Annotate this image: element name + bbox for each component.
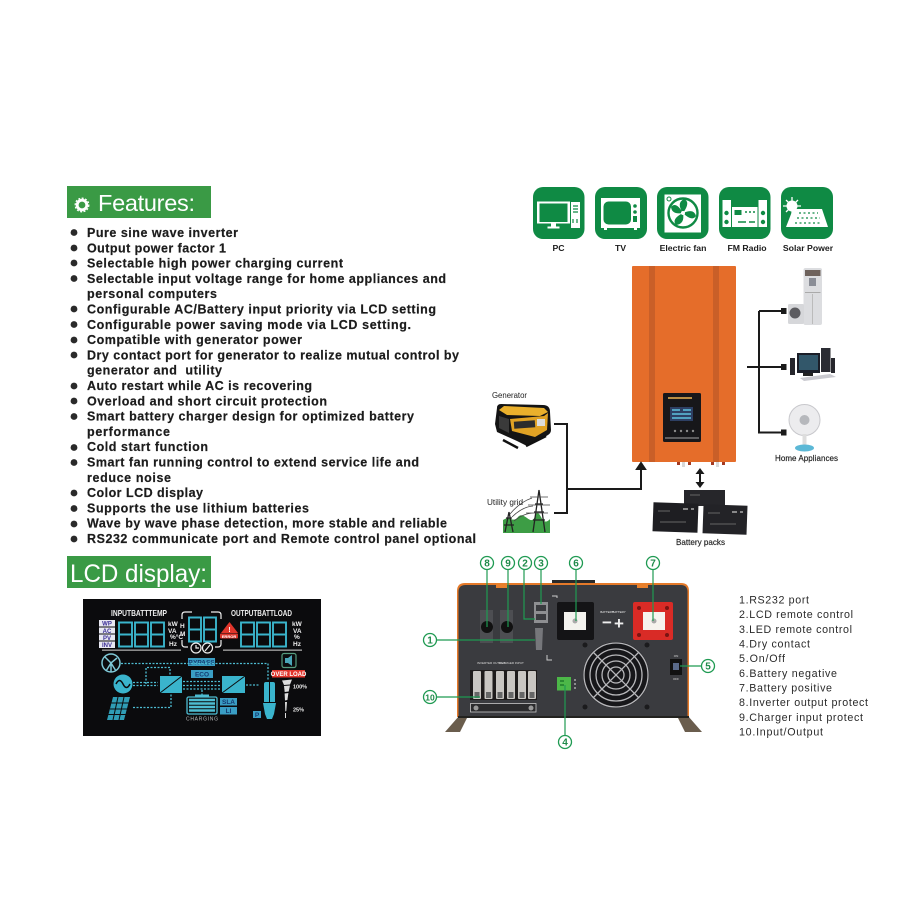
icon: TV: [595, 187, 647, 239]
callout leader lines: [436, 570, 702, 736]
callout number badges: [424, 556, 714, 748]
rear unit top connectors: [552, 580, 595, 583]
legend: rear panel parts: 9.Charger input protect: [739, 712, 863, 724]
features list: [71, 226, 476, 546]
label: generator: Generator: [492, 391, 527, 400]
legend: rear panel parts: 1.RS232 port: [739, 594, 809, 606]
rear polarity marks: BATTERY: [600, 610, 614, 614]
heading: Features: [67, 186, 211, 218]
features list: Dry contact port for generator to realize mutual control by: [87, 348, 459, 362]
callout numbers: 6: [573, 558, 579, 570]
callout numbers: 4: [562, 738, 568, 748]
LCD seven segment digits: [119, 618, 286, 646]
LCD source tags: PV: [103, 636, 111, 642]
icon: table fan: [789, 404, 820, 452]
rear power switch: ON: [674, 654, 678, 658]
LCD unit labels: VA: [293, 628, 302, 635]
LCD load bar: [282, 680, 307, 718]
LCD error warning: ERROR: [222, 634, 236, 639]
features list: Compatible with generator power: [87, 333, 302, 347]
LCD source tags: AC: [103, 629, 112, 635]
features list: Smart fan running control to extend service life and: [87, 456, 419, 470]
LCD battery type tags: SLA: [222, 699, 235, 706]
rear dry contact connector: [557, 677, 576, 690]
LCD source tags: WP: [102, 622, 112, 628]
features list: Selectable high power charging current: [87, 257, 344, 271]
rear terminal block: INVERTER OUTPUT: [477, 661, 505, 665]
LCD battery type tags: LI: [226, 708, 232, 715]
icon: solar power: [781, 187, 833, 239]
rear breakers: [480, 610, 513, 643]
legend: rear panel parts: 5.On/Off: [739, 653, 785, 665]
LCD battery icon: CHARGING: [186, 716, 218, 722]
LCD bulb icon: [263, 682, 276, 719]
rear polarity marks: +: [614, 614, 624, 633]
LCD unit labels: M: [180, 631, 185, 638]
appliance labels: [552, 243, 834, 253]
appliance labels: Solar Power: [783, 243, 834, 253]
features list: Selectable input voltage range for home appliances and: [87, 272, 446, 286]
heading: LCD display: LCD display:: [70, 560, 207, 588]
rear unit body: [457, 583, 689, 717]
features list: Wave by wave phase detection, more stable and reliable: [87, 517, 447, 531]
appliance labels: FM Radio: [727, 243, 767, 253]
label: battery packs: Battery packs: [676, 538, 725, 547]
LCD unit labels: [168, 621, 303, 648]
LCD source tags: INV: [102, 643, 112, 649]
LCD output header: OUTPUTBATTLOAD: [231, 608, 292, 618]
LCD converter icons: [160, 676, 245, 693]
appliance labels: PC: [552, 243, 565, 253]
LCD centre bracket and clocks: [182, 612, 221, 653]
LCD flow dashed lines: [121, 664, 268, 708]
LCD unit labels: VA: [168, 628, 177, 635]
LCD battery icon: [186, 694, 218, 722]
LCD unit labels: kW: [168, 621, 179, 628]
LCD error warning: [220, 622, 238, 639]
rear cooling fan: [582, 642, 650, 710]
label: home appliances: Home Appliances: [775, 454, 838, 463]
callout numbers: 2: [522, 558, 528, 570]
callout numbers: [425, 558, 711, 748]
LCD solar panel icon: [107, 697, 130, 720]
LCD input header: INPUTBATTTEMP: [111, 608, 167, 618]
LCD AC source icon: [114, 674, 132, 694]
legend: rear panel parts: 3.LED remote control: [739, 624, 852, 636]
rear battery negative terminal: [557, 602, 594, 640]
LCD unit labels: H: [180, 623, 185, 630]
rear terminal block: [470, 661, 537, 712]
callout numbers: 3: [538, 558, 544, 570]
callout numbers: 9: [505, 558, 511, 570]
LCD eco tag: ECO: [195, 672, 209, 678]
legend: rear panel parts: 2.LCD remote control: [739, 609, 853, 621]
LCD battery type tags: [220, 698, 261, 719]
rear power switch: [670, 654, 682, 681]
features list: performance: [87, 425, 170, 439]
features list: reduce noise: [87, 471, 171, 485]
legend: rear panel parts: [739, 594, 868, 738]
features list: Color LCD display: [87, 486, 203, 500]
LCD unit labels: kW: [292, 621, 303, 628]
icon: generator: [495, 404, 551, 448]
LCD battery type tags: P: [255, 712, 260, 719]
features list: generator and utility: [87, 364, 222, 378]
legend: rear panel parts: 6.Battery negative: [739, 668, 837, 680]
features list: Output power factor 1: [87, 241, 226, 255]
callout numbers: 1: [427, 636, 433, 646]
LCD unit labels: Hz: [293, 641, 302, 648]
rear polarity marks: −: [602, 613, 612, 632]
inverter front unit: [632, 266, 736, 467]
label: utility grid: Utility grid: [487, 498, 523, 507]
features list: Smart battery charger design for optimized battery: [87, 410, 414, 424]
features list: Pure sine wave inverter: [87, 226, 238, 240]
rear polarity marks: BATTERY: [612, 610, 626, 614]
LCD bypass tag: BYPASS: [188, 660, 215, 666]
icon: FM radio: [719, 187, 770, 239]
LCD eco tag: [191, 670, 213, 678]
panel: LCD display screen: [83, 599, 321, 736]
appliance labels: TV: [615, 243, 626, 253]
features list: Supports the use lithium batteries: [87, 501, 309, 515]
LCD overload tag: OVER LOAD: [271, 672, 307, 678]
LCD unit labels: Hz: [169, 641, 178, 648]
LCD grid tower icon: [102, 654, 120, 672]
icon: electric fan: [657, 187, 708, 239]
rear polarity marks: [600, 610, 626, 633]
icon: utility grid towers: [503, 490, 550, 533]
LCD load bar: 25%: [293, 708, 304, 714]
arrow: generator and grid to inverter: [554, 424, 645, 513]
callout numbers: 8: [484, 558, 490, 570]
LCD mute icon: [282, 654, 296, 668]
features list: personal computers: [87, 287, 217, 301]
features list: Configurable power saving mode via LCD setting.: [87, 318, 411, 332]
legend: rear panel parts: 8.Inverter output protect: [739, 697, 868, 709]
appliance labels: Electric fan: [660, 243, 706, 253]
features list: RS232 communicate port and Remote control panel optional: [87, 532, 476, 546]
callout numbers: 10: [425, 692, 435, 702]
LCD unit labels: %°C: [170, 633, 183, 641]
callout numbers: 7: [650, 558, 656, 570]
callout numbers: 5: [705, 662, 711, 672]
arrow: battery two-way: [696, 468, 704, 488]
rear unit feet: [445, 716, 702, 732]
LCD source tags: [99, 620, 115, 649]
features list: Auto restart while AC is recovering: [87, 379, 312, 393]
inverter rear panel: [445, 580, 702, 732]
inverter control panel: [663, 393, 701, 442]
arrow: output wiring to appliances: [747, 309, 786, 434]
icon: air conditioner and washer: [788, 268, 822, 325]
icon: battery packs: [652, 490, 748, 535]
legend: rear panel parts: 4.Dry contact: [739, 638, 810, 650]
icon: desktop computer: [790, 348, 836, 381]
features list: Configurable AC/Battery input priority via LCD setting: [87, 302, 436, 316]
features list: Cold start function: [87, 440, 208, 454]
rear power switch: OFF: [673, 677, 679, 681]
LCD load bar: 100%: [293, 684, 307, 690]
rear terminal block: CHARGER INPUT: [499, 661, 524, 665]
rear battery positive terminal: [633, 602, 673, 640]
LCD error warning: !: [228, 627, 231, 634]
icon: PC: [533, 187, 584, 239]
legend: rear panel parts: 7.Battery positive: [739, 682, 832, 694]
features list: Overload and short circuit protection: [87, 394, 327, 408]
heading: Features: Features:: [98, 190, 195, 216]
legend: rear panel parts: 10.Input/Output: [739, 726, 823, 738]
LCD unit labels: %: [294, 634, 300, 641]
rear communication ports: [534, 596, 557, 660]
